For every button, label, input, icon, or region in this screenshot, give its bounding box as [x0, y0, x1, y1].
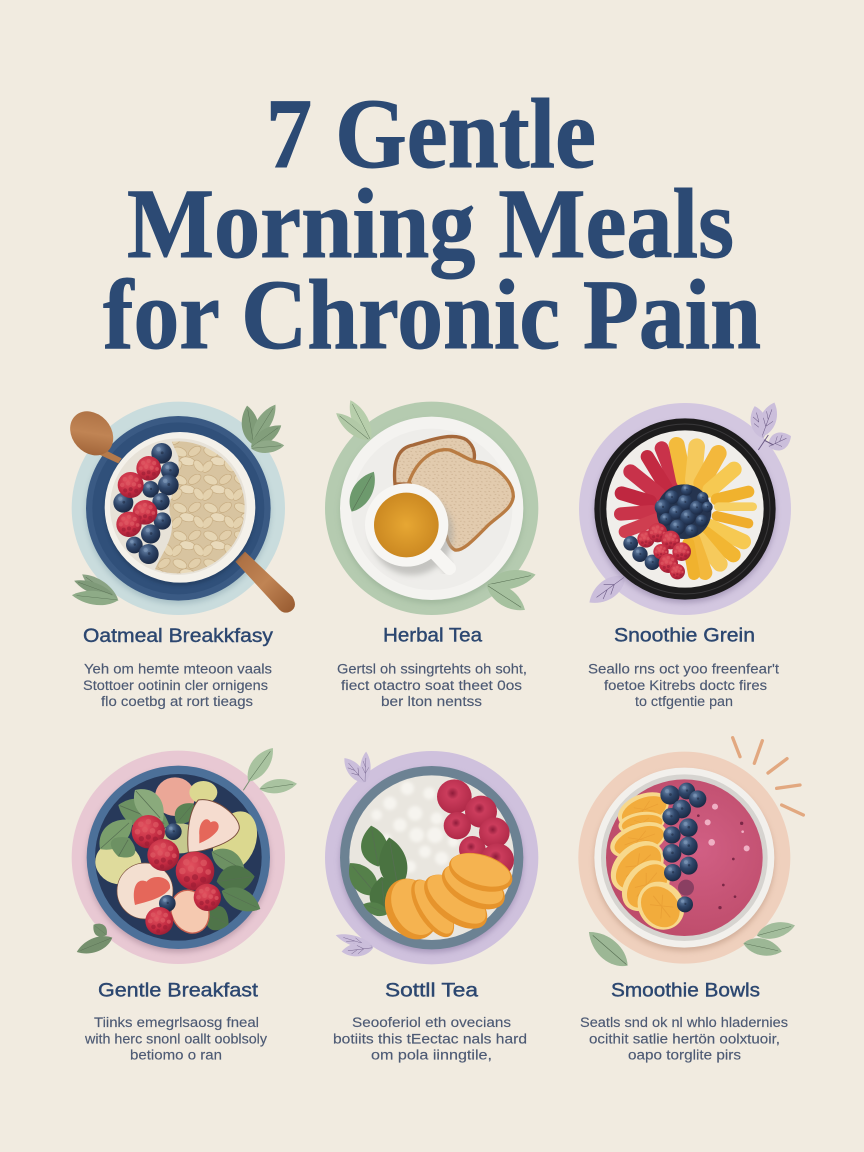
red fruit strips — [621, 448, 675, 532]
title: Morning Meals — [127, 168, 734, 279]
berries lower left — [623, 523, 691, 579]
description: botiits this tEectac nals hard — [333, 1032, 527, 1046]
panel: smoothie bowls — [578, 738, 803, 1062]
toast back slice — [395, 436, 474, 484]
description: ber lton nentss — [381, 694, 482, 709]
panel: gentle breakfast — [72, 743, 298, 1062]
bowl — [340, 766, 523, 953]
berries — [132, 815, 221, 935]
bowl — [594, 418, 776, 603]
description: Seatls snd ok nl whlo hladernies — [580, 1015, 788, 1030]
blueberries column — [660, 783, 706, 912]
description — [337, 662, 527, 709]
orange slices — [601, 785, 694, 939]
description: om pola iinngtile, — [371, 1048, 492, 1062]
icon: leaves bottom right — [742, 918, 797, 959]
yellow fruit strips — [677, 445, 753, 574]
illustration: black bowl with radial fruit — [579, 400, 795, 615]
description — [588, 662, 779, 709]
illustration: tea cup and toast on plate — [325, 397, 538, 617]
panel: herbal tea — [325, 397, 538, 709]
title — [103, 78, 761, 370]
description: to ctfgentie pan — [635, 694, 733, 709]
heading: Smoothie Bowls — [611, 980, 760, 1002]
description: Tiinks emegrlsaosg fneal — [94, 1015, 259, 1030]
description: Gertsl oh ssingrtehts oh soht, — [337, 662, 527, 676]
description: flo coetbg at rort tieags — [101, 694, 253, 709]
icon: leaves top right — [747, 400, 795, 455]
description: Seooferiol eth ovecians — [352, 1015, 511, 1030]
icon: leaves top left — [332, 397, 377, 445]
description: ocithit satlie hertön oolxtuoir, — [589, 1032, 780, 1046]
plate — [86, 416, 271, 604]
peach wedge — [164, 884, 216, 939]
heading: Snoothie Grein — [614, 626, 755, 646]
icon: leaves bottom left — [334, 930, 375, 958]
icon: spoon handle — [235, 552, 295, 613]
pudding texture — [371, 782, 459, 873]
strawberry half right — [188, 800, 239, 852]
illustration: fruit salad bowl — [72, 743, 298, 964]
icon: leaves top left — [339, 752, 371, 787]
description: betiomo o ran — [130, 1048, 222, 1062]
title: for Chronic Pain — [103, 259, 761, 370]
panel: smoothie green — [579, 400, 795, 709]
illustration: oatmeal bowl with berries and wooden spoon — [61, 401, 295, 615]
description: Stottoer ootinin cler ornigens — [83, 678, 268, 693]
description — [580, 1015, 788, 1062]
orange slices — [375, 846, 517, 949]
title: 7 Gentle — [266, 78, 596, 189]
blueberry cluster — [655, 484, 713, 539]
description: Yeh om hemte mteoon vaals — [84, 662, 272, 676]
description: fiect otactro soat theet 0os — [341, 678, 522, 693]
icon: leaves top right — [241, 743, 298, 796]
icon: sun rays — [733, 738, 803, 815]
icon: leaves bottom right — [482, 565, 537, 617]
illustration: pudding bowl with fruit — [325, 751, 538, 964]
panel: soothing tea — [325, 751, 538, 1062]
icon: leaves top right — [238, 401, 285, 454]
bowl — [87, 766, 270, 952]
smoothie speckles — [697, 804, 750, 909]
toast front slice — [409, 450, 513, 550]
illustration: pink smoothie bowl — [578, 738, 803, 974]
icon: leaves bottom left — [74, 920, 115, 959]
bowl — [105, 432, 255, 586]
berries — [113, 443, 179, 564]
melon and peach pieces — [89, 777, 265, 891]
heading: Oatmeal Breakkfasy — [83, 626, 274, 647]
icon: leaf bottom left — [584, 569, 631, 610]
icon: leaf on plate — [343, 467, 382, 516]
heading: Sottll Tea — [385, 980, 479, 1002]
icon: leaves bottom left — [71, 569, 122, 607]
heading: Gentle Breakfast — [98, 980, 259, 1002]
panel: oatmeal breakfast — [61, 401, 295, 709]
description — [333, 1015, 527, 1062]
description: Seallo rns oct yoo freenfear't — [588, 662, 779, 676]
bowl — [594, 768, 774, 951]
description: oapo torglite pirs — [628, 1048, 741, 1062]
green leaves — [340, 823, 411, 919]
icon: spoon bowl — [61, 403, 122, 464]
description: foetoe Kitrebs doctc fires — [604, 678, 767, 693]
icon: tea cup — [365, 483, 453, 575]
heading: Herbal Tea — [383, 626, 482, 646]
description — [83, 662, 272, 709]
strawberry half left — [117, 863, 173, 919]
icon: leaf bottom left — [582, 924, 634, 974]
raspberries — [437, 779, 514, 877]
oats — [155, 441, 245, 573]
description — [84, 1015, 267, 1062]
description: with herc snonl oallt ooblsoly — [84, 1032, 267, 1046]
herb leaves — [92, 781, 265, 935]
plate — [340, 417, 523, 603]
